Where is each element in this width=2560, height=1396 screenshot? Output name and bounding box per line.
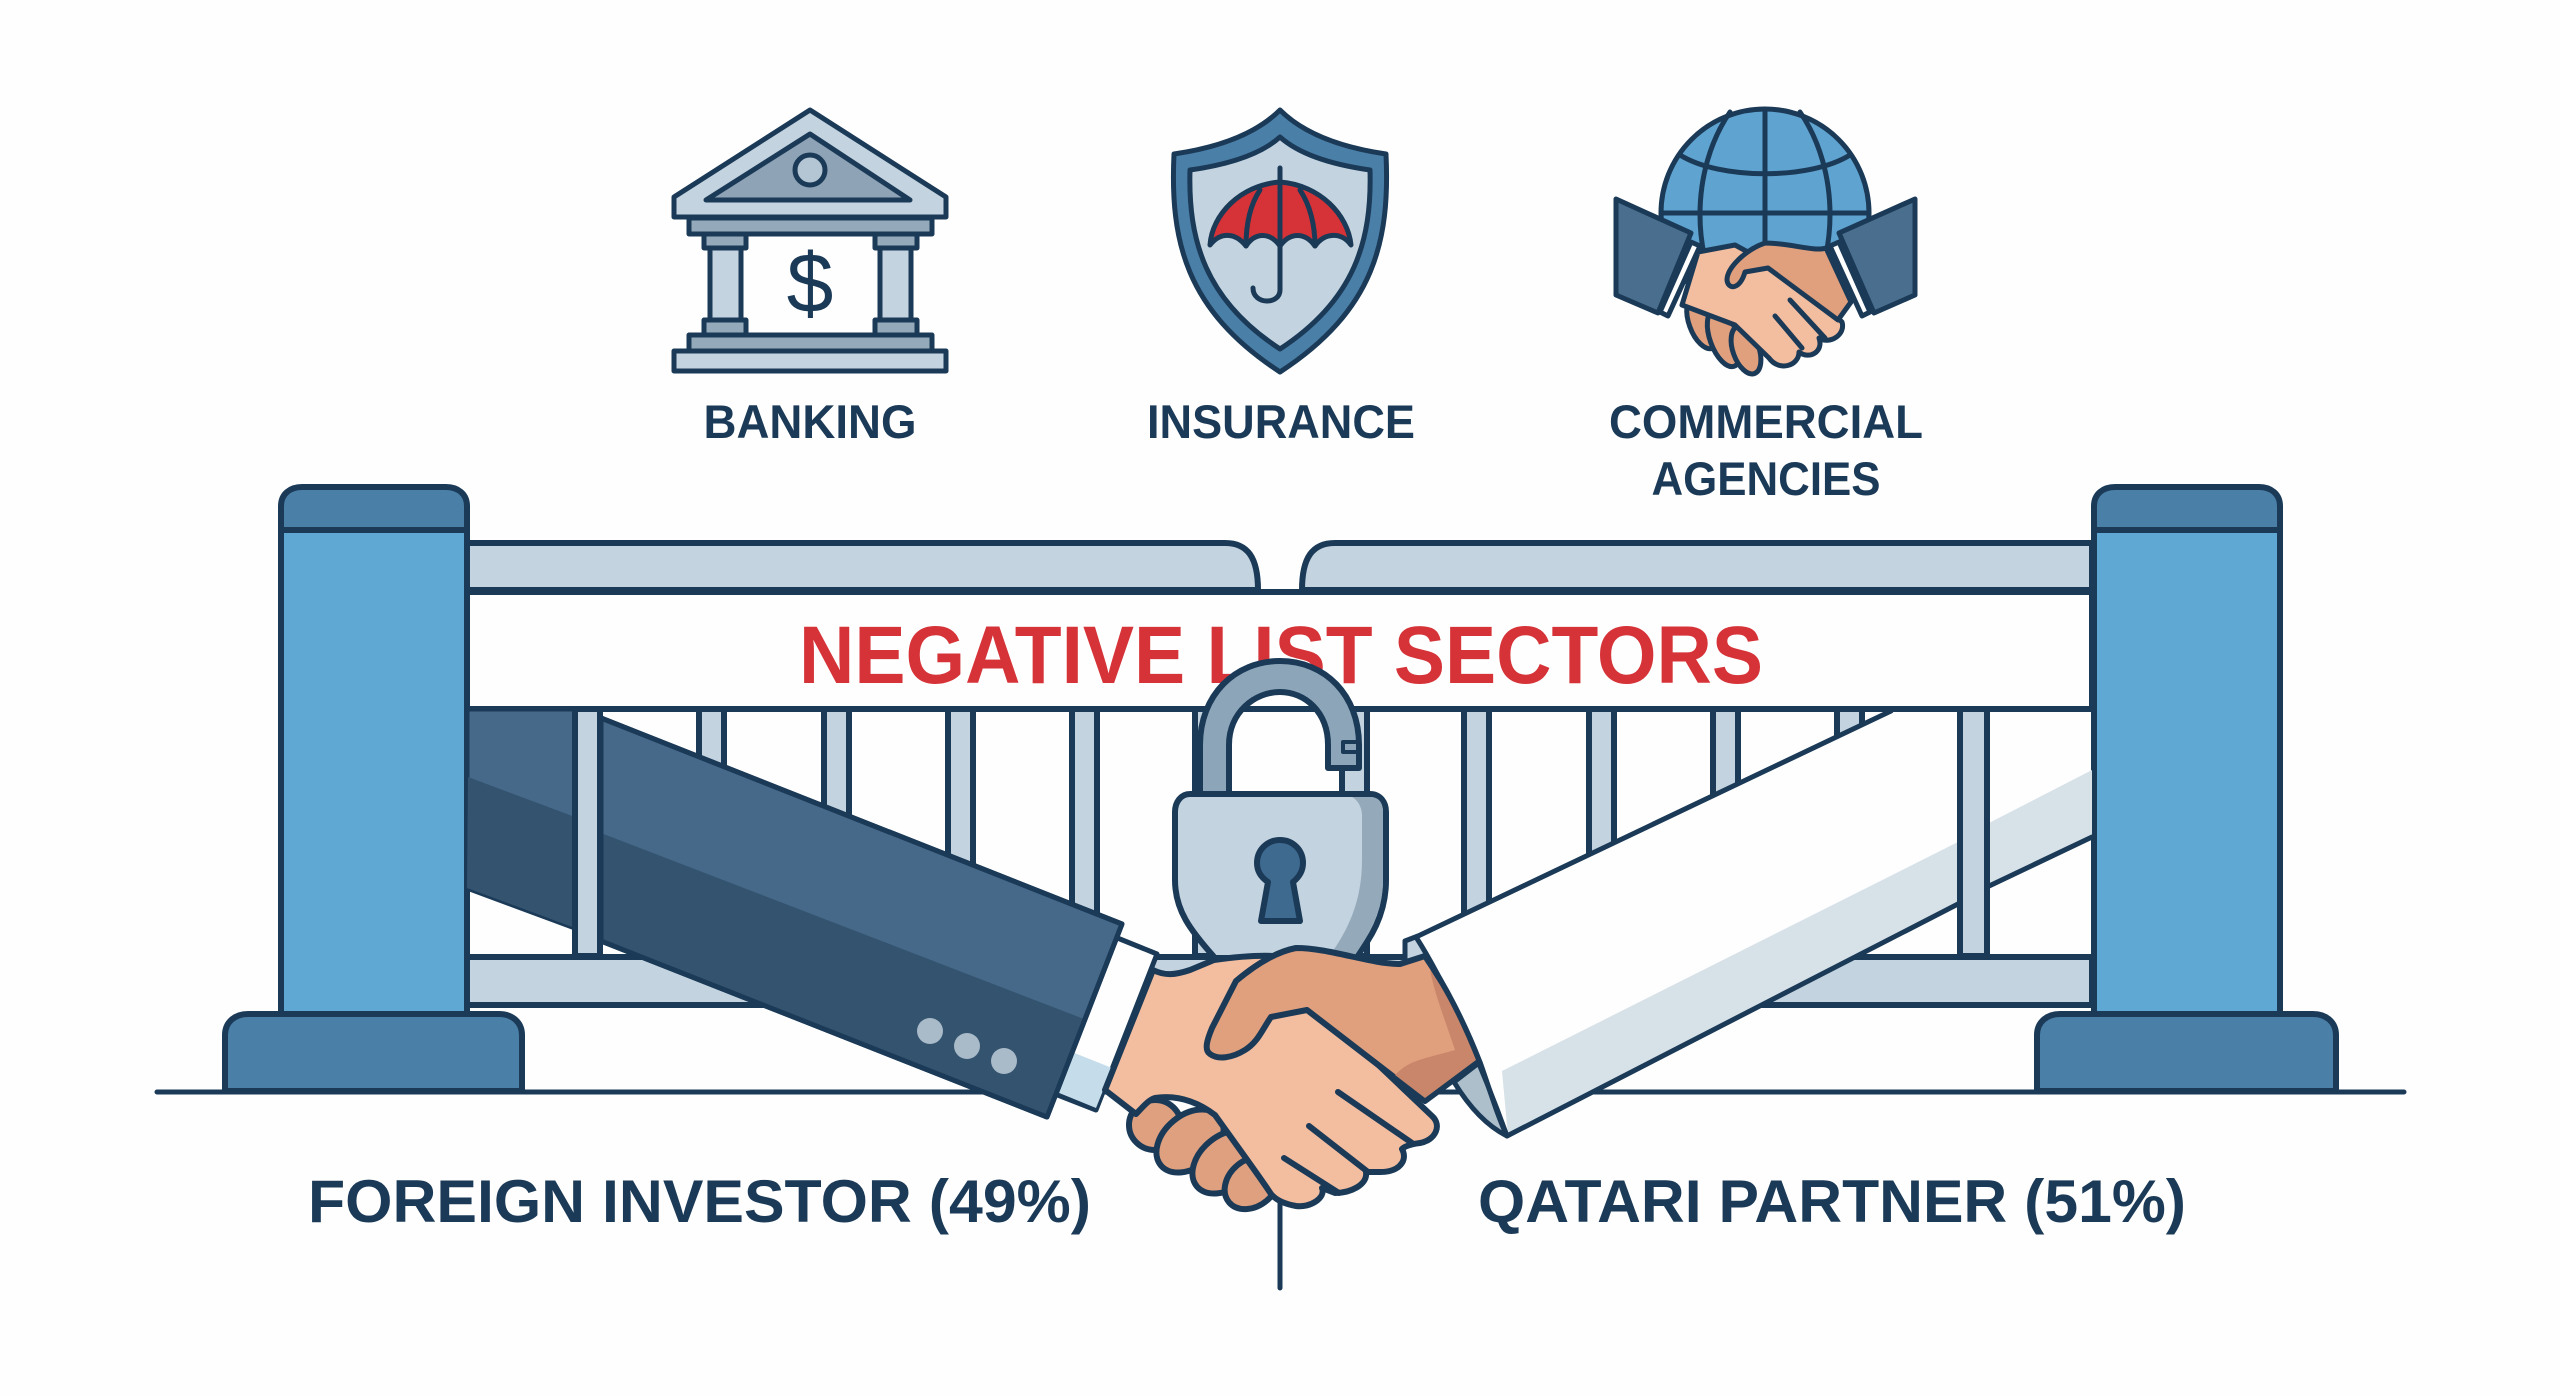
foreign investor hand (1105, 956, 1437, 1206)
left post (225, 487, 522, 1091)
icon: globe with handshake (1616, 109, 1915, 378)
icon: bank: $ (787, 236, 833, 330)
label: banking: BANKING (704, 395, 916, 448)
sleeve buttons (917, 1018, 1017, 1074)
label: commercial agencies (1609, 395, 1923, 505)
right post (2037, 487, 2336, 1091)
rear sleeve section (467, 709, 575, 928)
foreign investor arm (467, 709, 1157, 1117)
label: insurance: INSURANCE (1147, 395, 1415, 448)
ground line (157, 1090, 2404, 1094)
handshake (1105, 948, 1479, 1220)
label: commercial agencies: AGENCIES (1652, 452, 1880, 505)
qatari partner arm (1405, 709, 2092, 1136)
icon: insurance shield (1173, 110, 1387, 372)
label: qatari partner: QATARI PARTNER (51%) (1478, 1168, 2186, 1235)
gate: rails and balusters (467, 543, 2092, 1005)
label: commercial agencies: COMMERCIAL (1609, 395, 1923, 448)
qatari partner hand (1207, 948, 1479, 1101)
finger lines (1284, 1092, 1412, 1193)
gripping fingers (1129, 1097, 1290, 1220)
heading: negative list sectors: NEGATIVE LIST SECTORS (799, 610, 1763, 701)
sleeve (601, 718, 1122, 1117)
icon: bank (674, 110, 946, 371)
shirt cuff (1050, 935, 1157, 1110)
label: foreign investor: FOREIGN INVESTOR (49%) (308, 1168, 1091, 1235)
vertical divider line (1278, 1190, 1282, 1288)
padlock (1175, 661, 1386, 958)
